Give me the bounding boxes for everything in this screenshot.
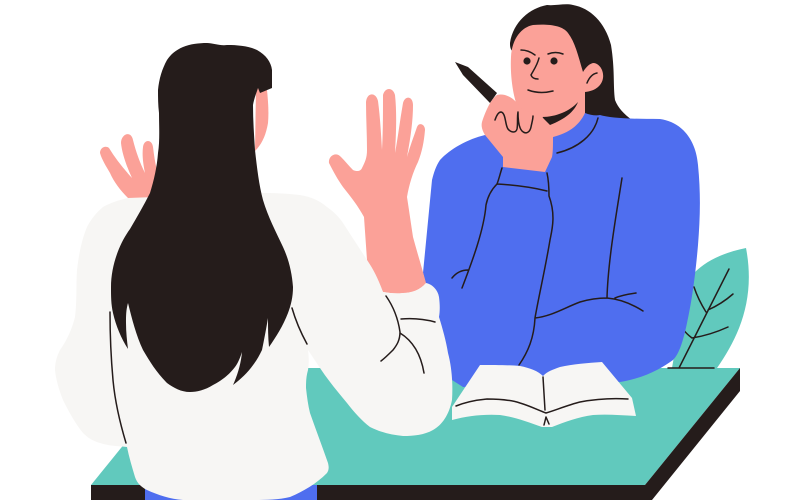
man's blue sweater — [423, 113, 700, 387]
finger lines — [495, 112, 533, 133]
woman: figure seen from behind — [55, 43, 452, 500]
shadow under chin — [542, 102, 578, 125]
woman's left hand — [100, 134, 165, 205]
shirt fold lines — [110, 296, 435, 443]
man's hand on chin — [482, 95, 553, 172]
woman's raised right hand and arm — [329, 89, 426, 293]
man's face details — [521, 50, 597, 92]
plant leaf — [672, 248, 749, 368]
blue trousers — [145, 485, 317, 500]
sweater fold lines — [452, 118, 643, 365]
man's face and neck — [511, 25, 603, 137]
man: seated figure — [423, 4, 700, 387]
woman's long hair — [111, 43, 293, 392]
plant stems — [668, 269, 733, 368]
woman's white shirt — [55, 193, 452, 500]
open book — [452, 362, 636, 427]
man's hair — [510, 4, 632, 120]
table — [91, 368, 740, 500]
pen — [455, 62, 497, 103]
woman's face sliver — [255, 88, 268, 151]
